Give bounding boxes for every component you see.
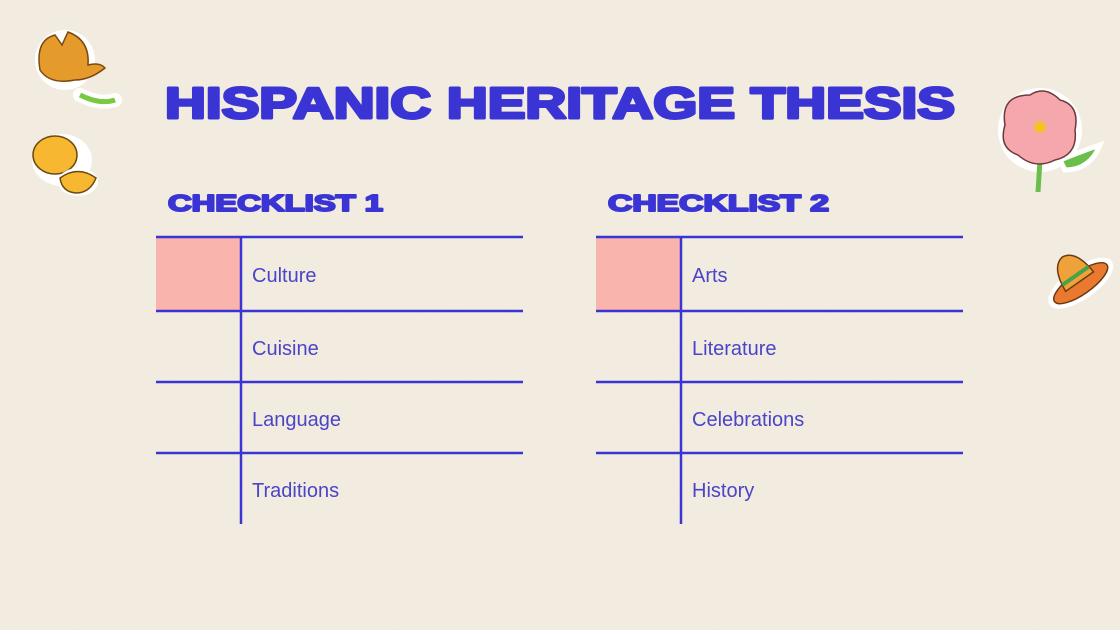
table: checklist 2: Arts xyxy=(692,265,728,287)
table: checklist 1 xyxy=(156,237,523,524)
heading: checklist 2: CHECKLIST 2 xyxy=(608,190,829,216)
icon: pink flower xyxy=(998,88,1100,192)
heading: checklist 1: CHECKLIST 1 xyxy=(168,190,383,216)
title: HISPANIC HERITAGE THESIS xyxy=(165,79,955,128)
table: checklist 1: Culture xyxy=(252,265,316,287)
table: checklist 2: Celebrations xyxy=(692,409,804,431)
icon: lemon xyxy=(32,134,98,196)
icon: sombrero xyxy=(1031,235,1120,318)
table: checklist 2 xyxy=(596,237,963,524)
table: checklist 2: History xyxy=(692,480,754,502)
icon: orange flower xyxy=(35,30,115,102)
table: checklist 1: Language xyxy=(252,409,341,431)
table: checklist 1: Cuisine xyxy=(252,338,319,360)
table: checklist 2: Literature xyxy=(692,338,776,360)
table: checklist 1: Traditions xyxy=(252,480,339,502)
